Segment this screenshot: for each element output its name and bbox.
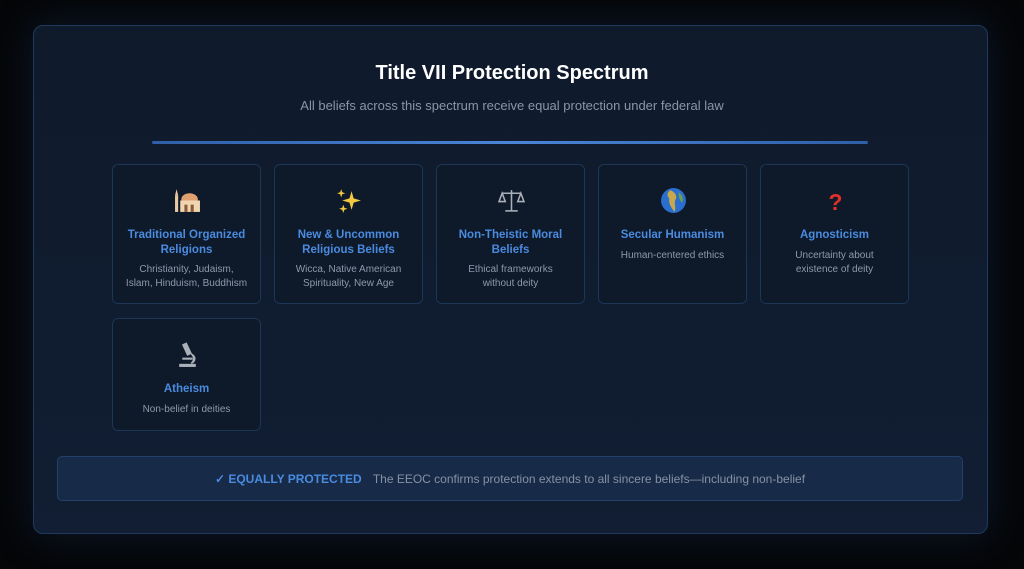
subtitle: All beliefs across this spectrum receive equal protection under federal law [300,98,724,113]
card: traditional: Religions [161,244,212,256]
card: new religious [274,164,423,304]
card: agnosticism: Uncertainty about [795,250,874,261]
card: traditional [112,164,261,304]
icon: sparkles [337,189,361,213]
card: secular humanism: Secular Humanism [621,229,724,241]
card: secular humanism: Human-centered ethics [621,250,724,261]
card: non-theistic: Beliefs [492,244,529,256]
icon: mosque [175,189,200,212]
card: non-theistic [436,164,585,304]
card: new religious: Spirituality, New Age [303,278,394,288]
card: traditional: Christianity, Judaism, [139,264,234,275]
card: traditional: Islam, Hinduism, Buddhism [126,278,247,288]
spectrum bar [152,141,868,144]
icon: microscope [179,342,196,367]
card: new religious: New & Uncommon [298,229,399,241]
card: atheism: Non-belief in deities [143,404,230,415]
card: agnosticism: existence of deity [796,264,873,274]
card: agnosticism [760,164,909,304]
card: traditional: Traditional Organized [128,229,245,241]
card: secular humanism [598,164,747,304]
card: non-theistic: without deity [483,278,538,288]
card: atheism [112,318,261,431]
card: non-theistic: Ethical frameworks [468,264,553,275]
card: non-theistic: Non-Theistic Moral [459,229,562,241]
title: Title VII Protection Spectrum [375,62,649,84]
icon: scales [498,190,525,212]
card: new religious: Religious Beliefs [302,244,395,256]
card: atheism: Atheism [164,383,209,395]
card: new religious: Wicca, Native American [296,264,401,275]
icon: globe [661,188,686,213]
callout banner [57,456,963,501]
callout banner: ✓ EQUALLY PROTECTED The EEOC confirms protection extends to all sincere beliefs—including non-belief [215,472,805,486]
card: agnosticism: Agnosticism [800,229,869,241]
